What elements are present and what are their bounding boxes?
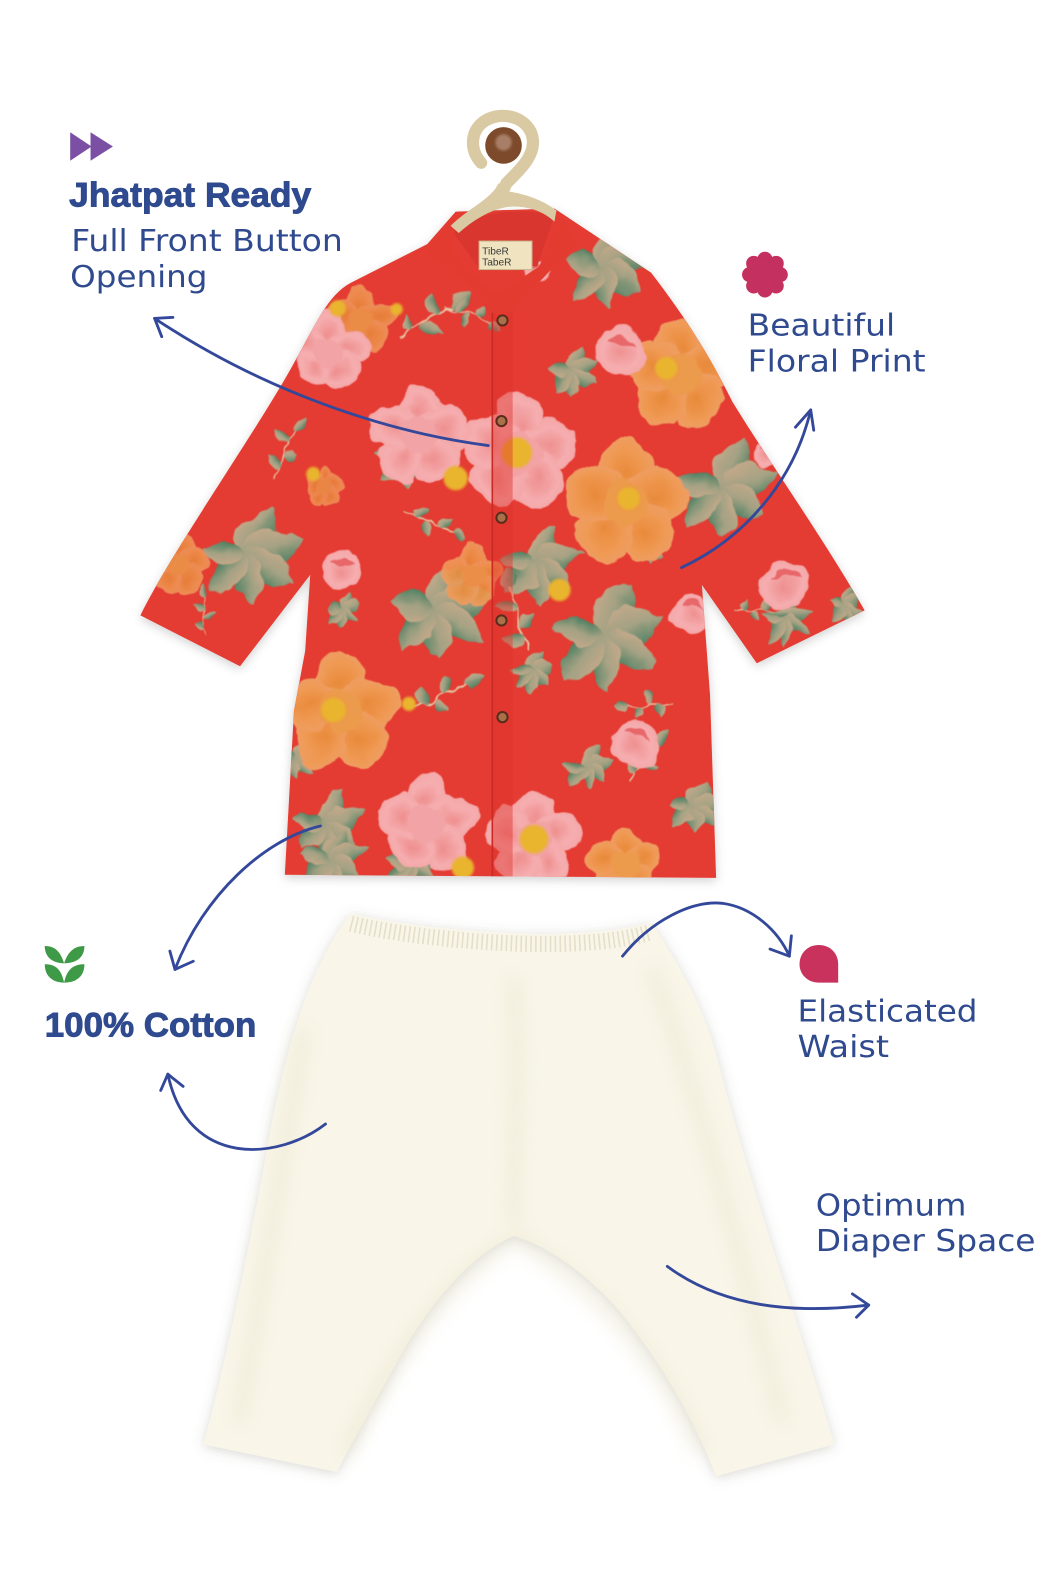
- brand label: TabeR: [482, 257, 512, 268]
- trousers: [203, 913, 834, 1476]
- icon: flower: [742, 252, 788, 298]
- trousers body: [203, 913, 834, 1476]
- arrow: trouser cotton: [161, 1074, 326, 1149]
- description: Beautiful: [748, 309, 895, 344]
- shirt body: [140, 209, 865, 878]
- flower centres: [306, 300, 677, 879]
- heading: 100% Cotton: [45, 1007, 256, 1045]
- description: Full Front Button: [71, 224, 343, 259]
- floral print: [147, 211, 871, 901]
- orange flowers: [147, 286, 735, 901]
- arrow: floral print: [682, 410, 814, 568]
- kurta shirt: [140, 209, 871, 901]
- pink flowers: [288, 257, 808, 885]
- description: [748, 309, 926, 379]
- description: Opening: [70, 260, 208, 295]
- arrow: diaper space: [667, 1266, 869, 1317]
- hanger arms: [451, 183, 556, 233]
- hanger hook: [473, 116, 533, 193]
- description: [70, 224, 343, 295]
- elastic waistband: [351, 924, 649, 944]
- hanger knob: [485, 127, 522, 164]
- brand label: [479, 241, 532, 270]
- description: [816, 1189, 1036, 1259]
- buttons: [496, 315, 508, 722]
- feature: elasticated waist: [797, 945, 978, 1065]
- feature: Jhatpat Ready: [69, 132, 343, 295]
- arrow: shirt cotton: [170, 826, 320, 969]
- neck inner: [453, 211, 554, 267]
- description: Floral Print: [748, 344, 926, 379]
- feature: diaper space: [816, 1189, 1036, 1259]
- arrow: button opening: [155, 317, 488, 446]
- icon: fast forward: [70, 132, 113, 161]
- description: Diaper Space: [816, 1224, 1036, 1259]
- icon: petal: [800, 945, 838, 983]
- trousers fold shading: [239, 966, 783, 1455]
- icon: leaves: [45, 946, 84, 983]
- heading: Jhatpat Ready: [69, 176, 312, 214]
- feature: 100% cotton: [45, 946, 256, 1045]
- collar: [453, 212, 552, 313]
- hanger: [451, 116, 556, 233]
- feature: floral print: [742, 252, 926, 379]
- arrow: waist: [623, 903, 791, 956]
- description: [797, 994, 978, 1065]
- brand label: TibeR: [482, 246, 509, 257]
- placket: [492, 310, 513, 880]
- description: Waist: [797, 1030, 889, 1065]
- description: Optimum: [816, 1189, 966, 1224]
- leaves: [198, 217, 871, 894]
- description: Elasticated: [797, 994, 978, 1029]
- twigs: [179, 285, 796, 784]
